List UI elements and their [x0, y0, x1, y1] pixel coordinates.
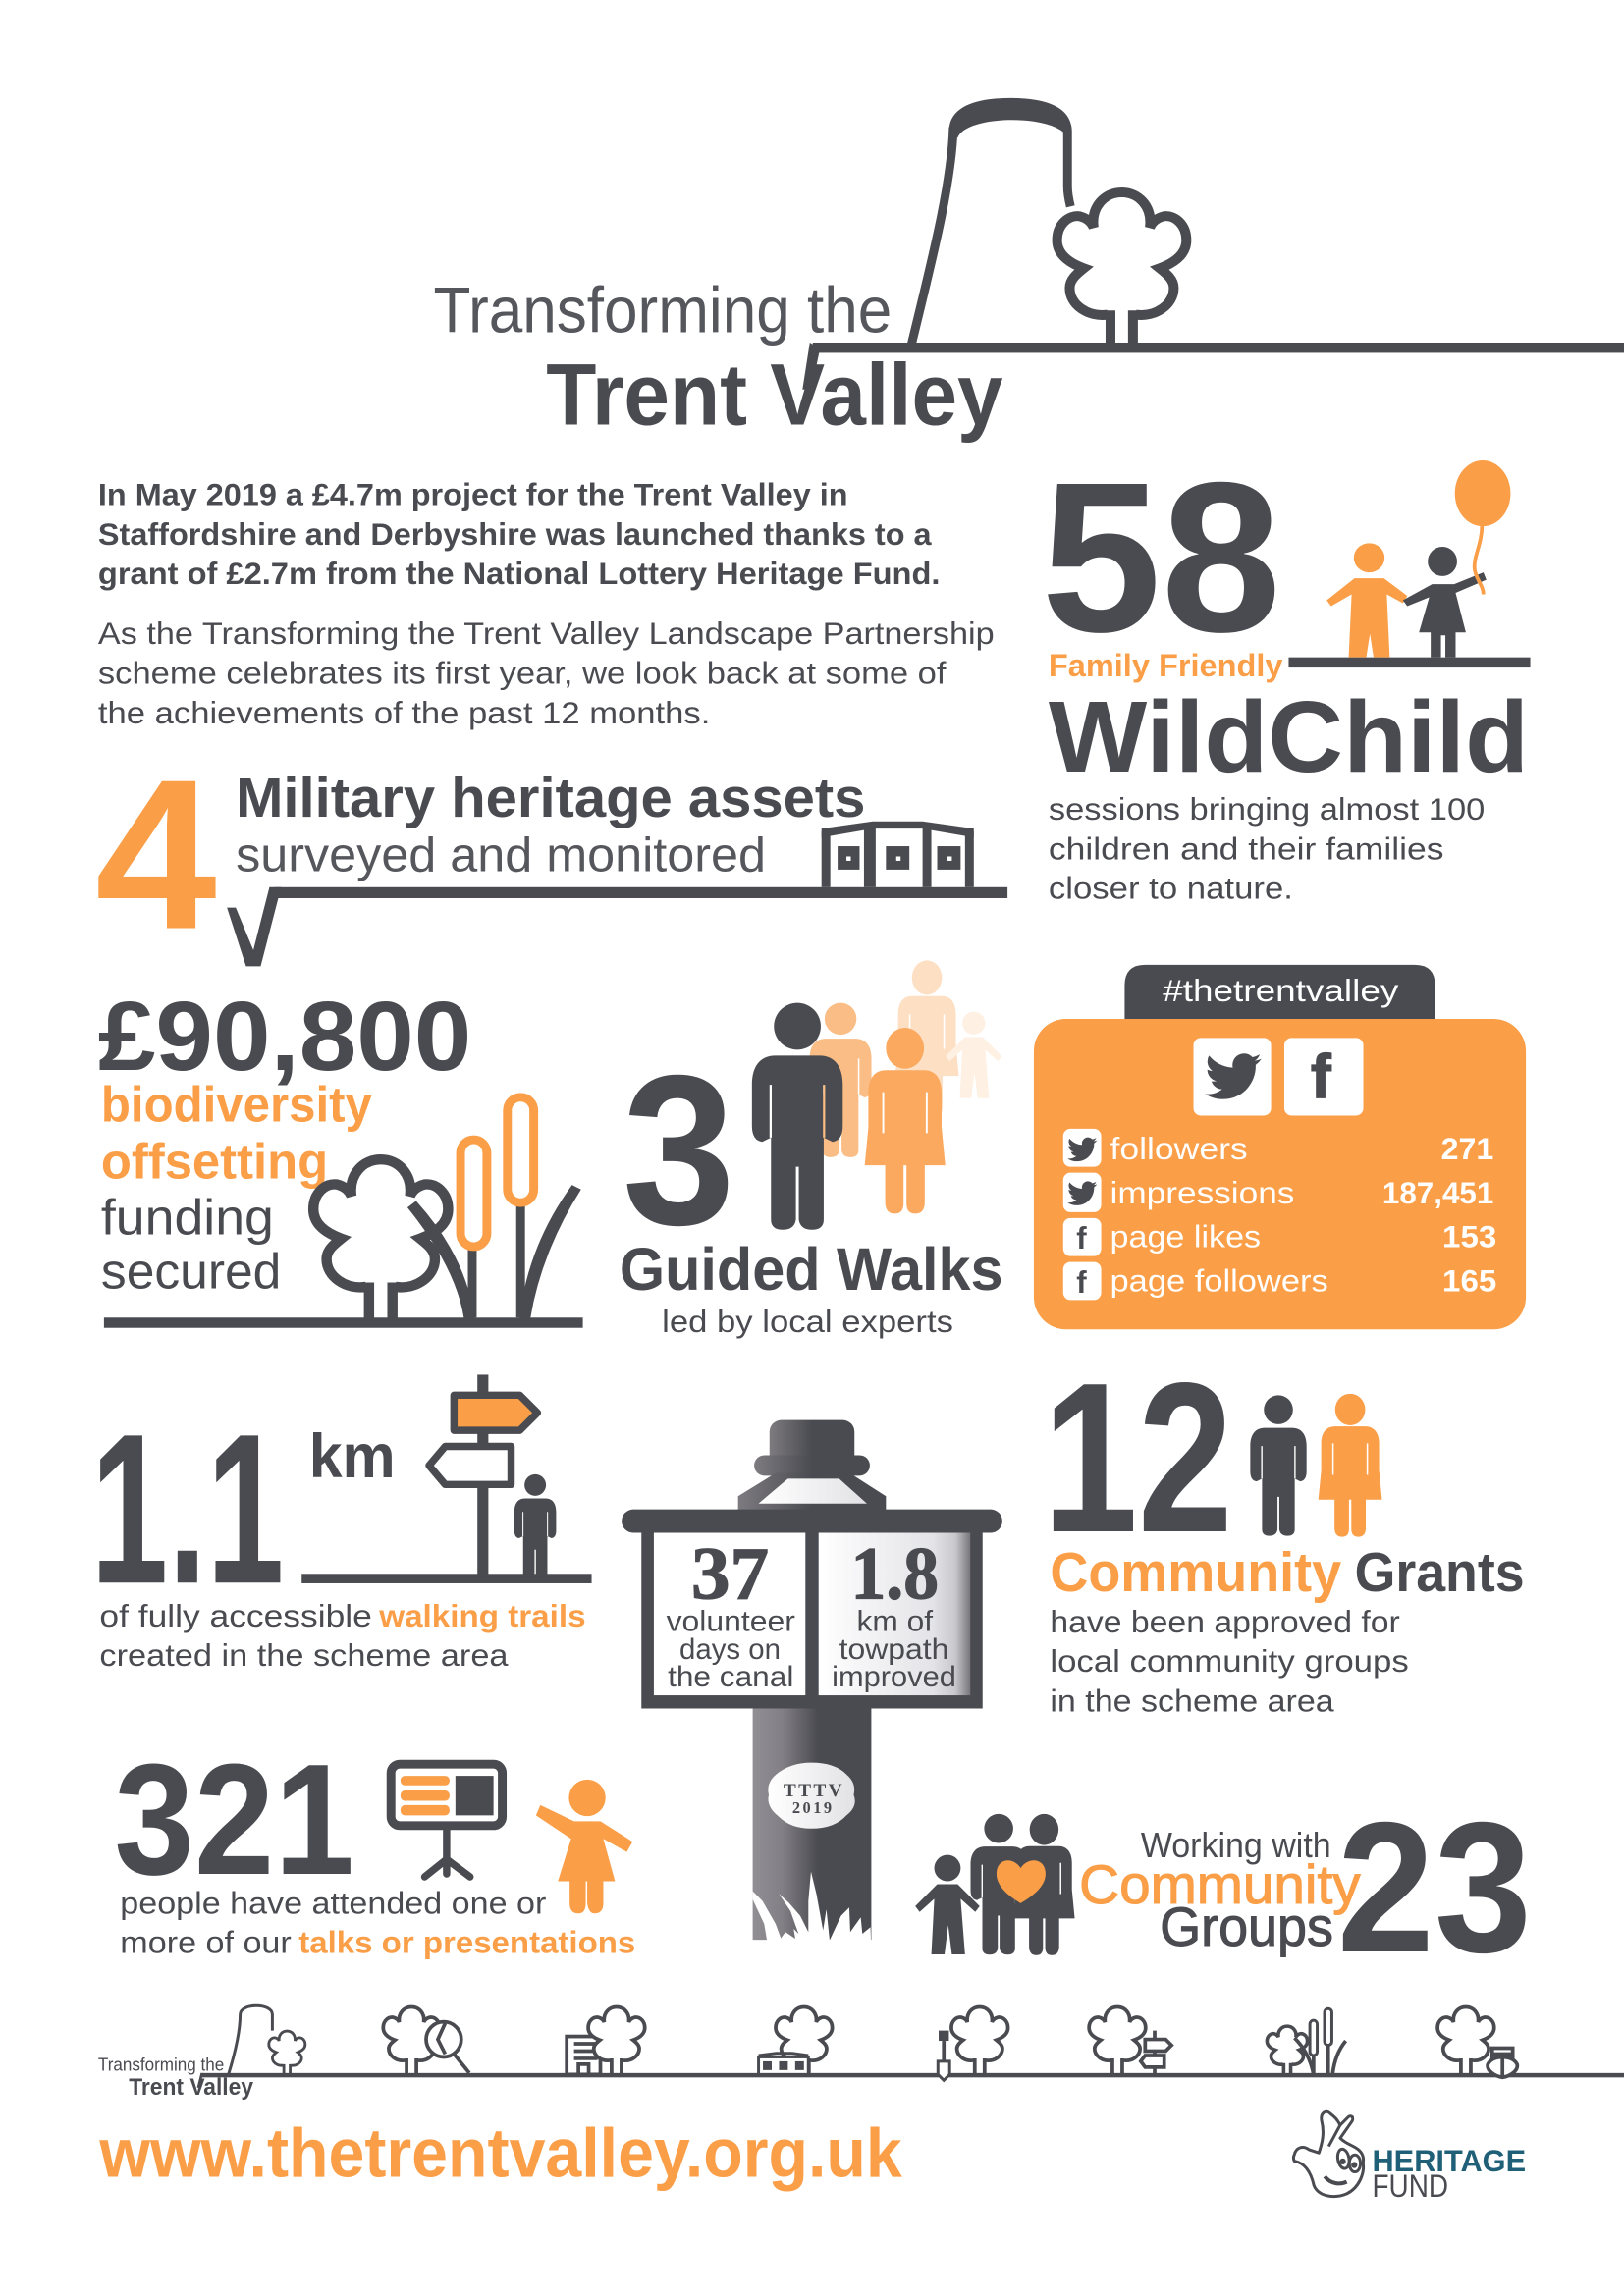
icon: walkers group: [752, 960, 1001, 1230]
description: have been approved for: [1050, 1605, 1400, 1639]
row: impressions: 187,451: [1382, 1176, 1493, 1210]
small logo: tower and title: Trent Valley: [129, 2074, 254, 2101]
text: HERITAGE: HERITAGE: [1372, 2144, 1526, 2178]
right panel: 1.8 km towpath: towpath: [839, 1633, 948, 1666]
icon: twitter: [1194, 1038, 1272, 1115]
icon: tree with boat: [1437, 2006, 1517, 2077]
icon: crossed fingers hand: [1293, 2111, 1364, 2197]
badge: TTTV 2019: [768, 1763, 855, 1829]
amount: £90,800: [98, 983, 471, 1092]
icon: facebook: f: [1311, 1043, 1331, 1112]
row: page likes: page likes: [1110, 1220, 1261, 1255]
intro: bold summary paragraph: In May 2019 a £4.7m project for the Trent Valley in: [98, 478, 848, 512]
icon: tree with building: [567, 2006, 645, 2074]
right panel: 1.8 km towpath: improved: [832, 1661, 956, 1693]
number 4: 4: [95, 736, 217, 975]
icon: presenter: [536, 1780, 632, 1913]
subheading: surveyed and monitored: [236, 828, 766, 881]
title: Transforming the Trent Valley: Transforming the: [433, 275, 892, 347]
row: page likes: [1063, 1218, 1496, 1256]
tab: hashtag: [1124, 965, 1435, 1019]
description: more of our: [120, 1926, 292, 1960]
hat and cone: [738, 1420, 886, 1511]
panel: working with 23 community groups: [915, 1785, 1532, 1992]
row: page followers: page followers: [1110, 1263, 1328, 1298]
number 12: 12: [1043, 1339, 1233, 1577]
title: Transforming the Trent Valley: [433, 275, 1003, 444]
intro: second paragraph: the achievements of the past 12 months.: [98, 696, 710, 730]
icon: tree with reeds: [1267, 2008, 1346, 2074]
number 23: 23: [1337, 1785, 1532, 1992]
description text: [1049, 792, 1485, 906]
icon: tree with signpost: [1089, 2006, 1171, 2074]
intro: bold summary paragraph: [98, 478, 941, 591]
row: followers: 271: [1441, 1132, 1493, 1166]
heading: Military heritage assets: [236, 768, 865, 829]
description: walking trails: [378, 1599, 586, 1633]
text: working with community groups: Groups: [1160, 1896, 1333, 1957]
panel: £90,800 biodiversity offsetting: [98, 983, 583, 1328]
icon: facebook: [1284, 1038, 1364, 1115]
left panel: 37 volunteer days: [654, 1533, 805, 1695]
text: working with community groups: [1079, 1826, 1361, 1957]
icon: tree with magnifier: [383, 2006, 469, 2074]
right panel: 1.8 km towpath: km of: [856, 1605, 934, 1637]
description text: children and their families: [1049, 831, 1444, 866]
row: followers: followers: [1110, 1132, 1248, 1166]
post: [753, 1698, 871, 1940]
heading: Guided Walks: [620, 1236, 1003, 1303]
small logo: tower and title: Transforming the: [98, 2055, 224, 2075]
description: of fully accessible: [99, 1599, 372, 1633]
row: impressions: [1063, 1173, 1493, 1212]
logo: Heritage Fund: [1293, 2111, 1526, 2204]
sign frame: [622, 1510, 1002, 1708]
line with tick: [227, 887, 1007, 966]
row: page likes: f: [1076, 1221, 1087, 1255]
row: page likes: 153: [1442, 1220, 1496, 1255]
intro: second paragraph: scheme celebrates its first year, we look back at some of: [98, 656, 947, 690]
text: working with community groups: Working with: [1141, 1826, 1331, 1865]
heading: [1050, 1542, 1525, 1604]
text block: biodiversity: [101, 1076, 372, 1132]
icon: tree with bunker: [759, 2006, 833, 2074]
title: Transforming the Trent Valley: Trent Valley: [546, 346, 1003, 444]
intro: second paragraph: [98, 616, 995, 730]
description: created in the scheme area: [99, 1638, 509, 1673]
intro: bold summary paragraph: grant of £2.7m from the National Lottery Heritage Fund.: [98, 557, 941, 591]
description: people have attended one or: [120, 1886, 546, 1920]
panel: 4 military heritage assets: [95, 736, 1007, 975]
number 58: 58: [1041, 439, 1281, 677]
row: followers: [1063, 1129, 1493, 1167]
left panel: 37 volunteer days: the canal: [668, 1661, 793, 1693]
panel: 58 WildChild sessions: [1041, 439, 1531, 906]
badge: TTTV 2019: TTTV: [784, 1781, 842, 1801]
description: talks or presentations: [298, 1926, 635, 1960]
row: impressions: impressions: [1110, 1176, 1294, 1210]
description: [120, 1886, 635, 1960]
text: FUND: FUND: [1372, 2167, 1448, 2204]
description: [1050, 1605, 1409, 1718]
website address: www.thetrentvalley.org.uk: [98, 2115, 903, 2192]
panel: canal signpost with 37 and 1.8: [622, 1420, 1002, 1950]
description text: closer to nature.: [1049, 872, 1293, 906]
panel: 321 talks or presentations: [114, 1732, 635, 1960]
left panel: 37 volunteer days: volunteer: [667, 1605, 795, 1637]
caption: led by local experts: [662, 1305, 953, 1339]
text block: offsetting: [101, 1134, 328, 1190]
icon: tree with spade: [938, 2006, 1008, 2080]
icon: tree and reeds: [104, 1097, 583, 1328]
right panel: 1.8 km towpath: [819, 1533, 970, 1695]
text block: funding: [101, 1189, 274, 1245]
panel: 3 Guided Walks: [620, 960, 1003, 1339]
unit km: km: [309, 1422, 396, 1491]
panel: 12 Community Grants: [1043, 1339, 1525, 1718]
icon: man and woman: [1250, 1394, 1382, 1537]
text: working with community groups: Community: [1079, 1854, 1361, 1915]
left panel: 37 volunteer days: days on: [679, 1633, 781, 1666]
intro: bold summary paragraph: Staffordshire and Derbyshire was launched thanks to a: [98, 517, 932, 552]
description: in the scheme area: [1050, 1683, 1334, 1718]
footer: line of small icons: [98, 2005, 1624, 2101]
label: Family Friendly: Family Friendly: [1049, 647, 1283, 683]
heading: WildChild: WildChild: [1049, 680, 1529, 793]
panel: social media stats: [1034, 965, 1526, 1329]
left panel: 37 volunteer days: 37: [691, 1533, 769, 1616]
text block: [101, 1076, 372, 1299]
grass: [753, 1872, 871, 1950]
tab: hashtag: #thetrentvalley: [1163, 974, 1399, 1008]
small logo: tower and title: [98, 2005, 305, 2101]
number 1.1: 1.1: [90, 1390, 284, 1629]
row: page followers: f: [1076, 1265, 1087, 1300]
intro: second paragraph: As the Transforming the Trent Valley Landscape Partnership: [98, 616, 995, 651]
description text: sessions bringing almost 100: [1049, 792, 1485, 827]
icon: family with heart: [915, 1814, 1075, 1955]
icon: signpost and walker: [301, 1374, 592, 1583]
orange box: [1034, 1019, 1526, 1329]
heading: Grants: [1355, 1542, 1525, 1604]
right panel: 1.8 km towpath: 1.8: [851, 1533, 939, 1616]
horizon line: [200, 2073, 1624, 2077]
text block: secured: [101, 1243, 281, 1299]
illustration: cooling tower, tree and horizon line: [802, 98, 1624, 390]
number 321: 321: [114, 1732, 354, 1908]
badge: TTTV 2019: 2019: [792, 1798, 832, 1817]
description: [99, 1599, 586, 1673]
icon: presentation board: [391, 1764, 503, 1877]
heading: Community: [1050, 1542, 1342, 1604]
panel: 1.1 km walking trails: [90, 1374, 592, 1673]
icon: two children with balloon: [1288, 460, 1531, 667]
number 3: 3: [623, 1032, 735, 1270]
icon: bunker: [822, 822, 974, 887]
description: local community groups: [1050, 1644, 1409, 1679]
row: page followers: [1063, 1262, 1496, 1300]
row: page followers: 165: [1442, 1263, 1496, 1298]
